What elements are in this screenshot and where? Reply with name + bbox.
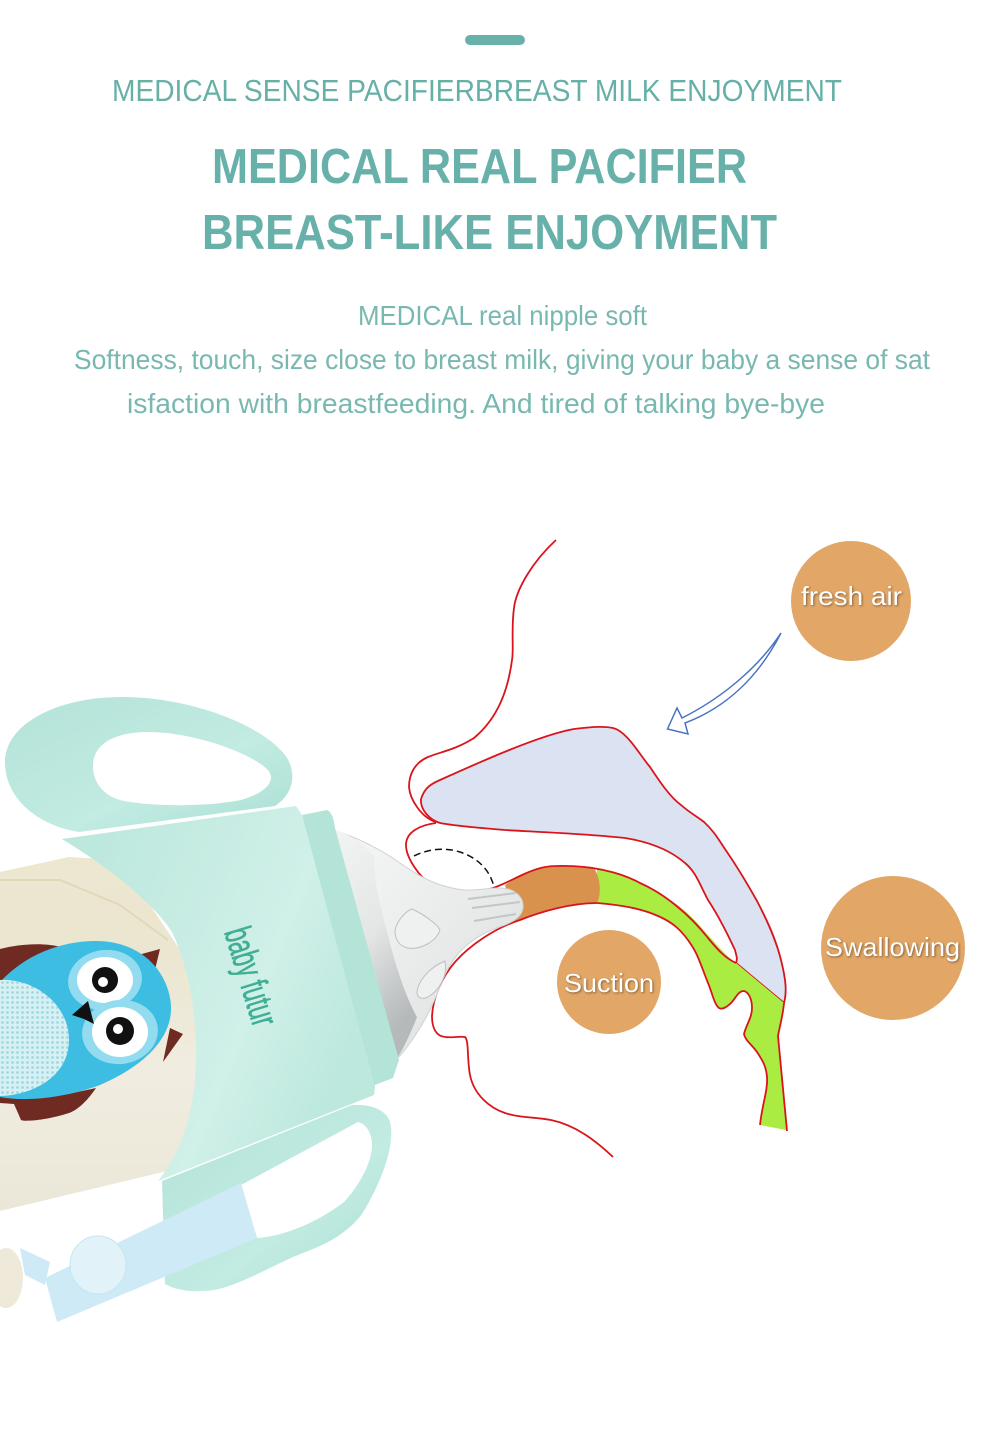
description text <box>74 300 930 419</box>
bottle body <box>0 857 220 1211</box>
upper lip and palate outline <box>406 823 736 963</box>
owl beak <box>72 1001 94 1024</box>
owl wings <box>0 944 120 1121</box>
baby bottle illustration <box>0 697 523 1322</box>
top handle <box>5 697 292 832</box>
air valve lower <box>417 961 446 998</box>
bottle shoulder highlight <box>0 880 168 940</box>
callout: suction: Suction <box>564 968 654 998</box>
main heading: BREAST-LIKE ENJOYMENT <box>202 206 777 260</box>
air flow arrow <box>668 633 781 734</box>
bottle neck and nipple <box>330 829 523 1060</box>
brand text: baby futur <box>216 922 287 1031</box>
owl body <box>0 941 171 1099</box>
air valve upper <box>395 909 440 948</box>
callout: suction <box>557 930 661 1034</box>
owl belly <box>0 980 69 1096</box>
description text: MEDICAL real nipple soft <box>358 300 647 331</box>
sleeve <box>62 806 375 1181</box>
upper face outline <box>409 540 556 822</box>
strap band <box>45 1183 257 1322</box>
callout: fresh air: fresh air <box>801 581 902 611</box>
nipple ridges <box>468 893 520 921</box>
beads <box>0 1248 23 1308</box>
subtitle: MEDICAL SENSE PACIFIERBREAST MILK ENJOYMENT <box>112 73 842 108</box>
strap connector <box>20 1248 50 1285</box>
nasal cavity <box>421 727 786 1003</box>
inner shell <box>334 829 417 1060</box>
throat passage <box>597 868 786 1130</box>
callout: fresh air <box>791 541 911 661</box>
dashed arc <box>414 849 494 887</box>
owl print <box>0 941 183 1121</box>
pacifier strap <box>0 1183 257 1322</box>
suction area <box>505 866 600 922</box>
throat outlines <box>597 903 787 1131</box>
description text: Softness, touch, size close to breast milk, giving your baby a sense of sat <box>74 344 930 375</box>
snap button <box>70 1236 126 1294</box>
top accent bar <box>465 35 525 45</box>
lower face outline <box>432 903 613 1157</box>
owl ear and tail <box>21 949 183 1121</box>
callout: swallowing <box>821 876 965 1020</box>
main heading: MEDICAL REAL PACIFIER <box>212 140 747 194</box>
glass nipple shape <box>330 829 523 1060</box>
main heading <box>202 140 777 260</box>
sleeve collar <box>302 810 399 1086</box>
owl upper eye <box>64 945 146 1015</box>
mouth and throat diagram <box>406 540 787 1157</box>
description text: isfaction with breastfeeding. And tired of talking bye-bye <box>127 388 825 419</box>
bottom handle <box>162 1105 391 1291</box>
callout: swallowing: Swallowing <box>825 932 960 962</box>
owl lower eye <box>78 995 162 1069</box>
